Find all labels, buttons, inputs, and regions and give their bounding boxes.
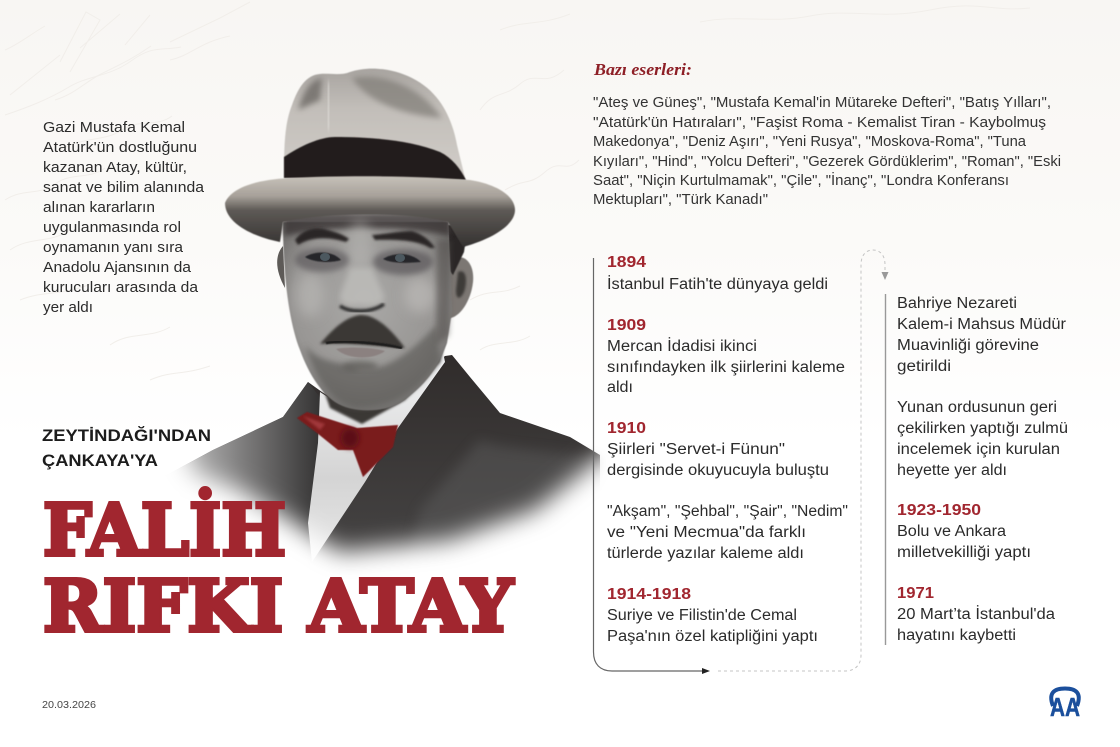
bow tie (297, 412, 398, 477)
hat band (284, 137, 466, 180)
timeline right column: getirildi (897, 358, 951, 375)
intro text: alınan kararların (43, 199, 155, 216)
timeline left column: 1910 (607, 420, 646, 437)
intro text: kurucuları arasında da (43, 279, 199, 296)
works list: Saat", "Niçin Kurtulmamak", "Çile", "İnanç", "Londra Konferansı (593, 171, 1009, 189)
coat and shirt (176, 355, 601, 570)
timeline left column: Mercan İdadisi ikinci (607, 337, 757, 355)
title: RIFKI ATAY (43, 564, 514, 648)
intro text: Atatürk'ün dostluğunu (43, 139, 197, 156)
cheek highlights (296, 273, 324, 317)
ears (447, 257, 473, 318)
title (43, 488, 514, 648)
timeline left column: 1894 (607, 254, 646, 271)
nose (340, 268, 384, 305)
intro text: Anadolu Ajansının da (43, 259, 192, 276)
timeline right column: Bahriye Nezareti (897, 295, 1017, 312)
timeline right column: heyette yer aldı (897, 462, 1007, 479)
subtitle: ÇANKAYA'YA (42, 451, 158, 470)
timeline right column: 1971 (897, 585, 934, 602)
intro text (43, 119, 205, 316)
works list: "Atatürk'ün Hatıraları", "Faşist Roma - Kemalist Tiran - Kaybolmuş (593, 115, 1046, 131)
timeline left column: sınıfındayken ilk şiirlerini kaleme (607, 359, 845, 376)
stubble (305, 325, 440, 408)
title: FALİH (43, 488, 286, 572)
intro text: uygulanmasında rol (43, 219, 181, 236)
timeline left column: ve "Yeni Mecmua"da farklı (607, 524, 806, 541)
icon: AA logo: AA (1050, 692, 1080, 722)
timeline right column: 1923-1950 (897, 502, 981, 519)
works heading: Bazı eserleri: (593, 60, 692, 79)
timeline left column (607, 254, 848, 645)
timeline right column: hayatını kaybetti (897, 627, 1016, 644)
subtitle: ZEYTİNDAĞI'NDAN (42, 426, 211, 445)
timeline left column: İstanbul Fatih'te dünyaya geldi (607, 275, 828, 293)
intro text: sanat ve bilim alanında (43, 179, 205, 196)
eyebrows (295, 228, 349, 245)
intro text: kazanan Atay, kültür, (43, 159, 187, 176)
timeline left column: Suriye ve Filistin'de Cemal (607, 607, 797, 624)
face (283, 212, 452, 410)
shirt (308, 352, 445, 562)
lips (336, 348, 385, 358)
timeline connector arrows (594, 250, 888, 674)
timeline right column: Bolu ve Ankara (897, 523, 1006, 540)
timeline left column: aldı (607, 379, 633, 396)
works list: Kıyıları", "Hind", "Yolcu Defteri", "Gezerek Gördüklerim", "Roman", "Eski (593, 154, 1061, 170)
works list: Mektupları", "Türk Kanadı" (593, 192, 768, 208)
timeline right column: Kalem-i Mahsus Müdür (897, 316, 1066, 333)
timeline left column: Paşa'nın özel katipliğini yaptı (607, 628, 818, 645)
forehead shadow (283, 212, 450, 236)
timeline left column: Şiirleri "Servet-i Fünun" (607, 441, 785, 458)
works list: Makedonya", "Deniz Aşırı", "Yeni Rusya", "Moskova-Roma", "Tuna (593, 134, 1027, 150)
hat brim (225, 176, 515, 247)
hat crown (284, 69, 466, 182)
timeline left column: "Akşam", "Şehbal", "Şair", "Nedim" (607, 503, 848, 520)
neck shadow (320, 340, 445, 424)
eyes (305, 252, 341, 262)
timeline right column: Yunan ordusunun geri (897, 399, 1057, 416)
timeline right column: incelemek için kurulan (897, 441, 1060, 458)
portrait photo (165, 69, 600, 600)
works list (593, 95, 1061, 208)
background paper with handwriting (0, 0, 1120, 440)
eye sockets (295, 248, 349, 272)
intro text: oynamanın yanı sıra (43, 239, 184, 256)
timeline right column (897, 295, 1068, 644)
dark hair at temple (448, 225, 468, 275)
date: 20.03.2026 (42, 699, 96, 711)
subtitle (42, 426, 211, 470)
works list: "Ateş ve Güneş", "Mustafa Kemal'in Mütareke Defteri", "Batış Yılları", (593, 95, 1051, 111)
timeline left column: 1909 (607, 317, 646, 334)
timeline right column: 20 Mart’ta İstanbul'da (897, 605, 1055, 623)
timeline right column: çekilirken yaptığı zulmü (897, 420, 1068, 437)
timeline right column: Muavinliği görevine (897, 337, 1039, 354)
moustache (320, 315, 405, 348)
timeline left column: türlerde yazılar kaleme aldı (607, 545, 804, 562)
intro text: Gazi Mustafa Kemal (43, 119, 185, 136)
timeline left column: dergisinde okuyucuyla buluştu (607, 462, 829, 479)
intro text: yer aldı (43, 299, 93, 316)
timeline right column: milletvekilliği yaptı (897, 544, 1031, 561)
timeline left column: 1914-1918 (607, 586, 691, 603)
